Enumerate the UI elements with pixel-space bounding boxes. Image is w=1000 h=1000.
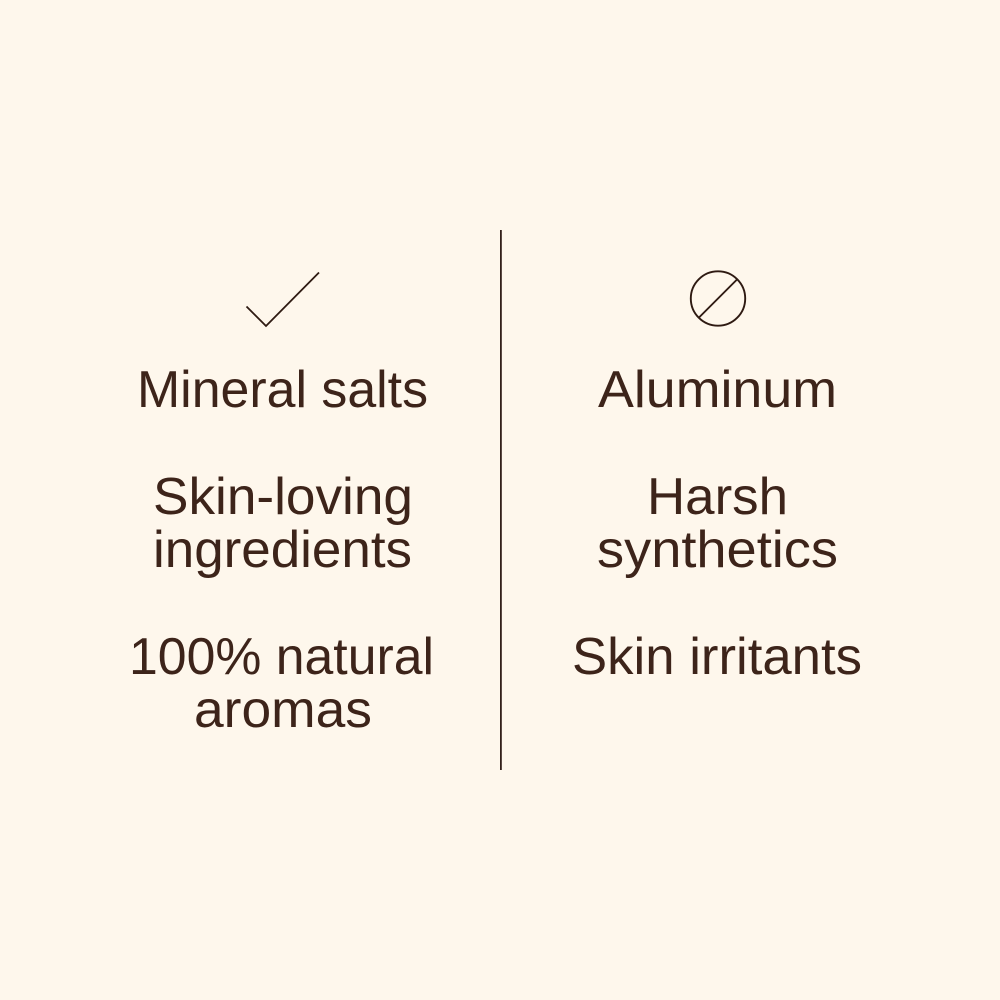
text: skin-loving ingredients: ingredients <box>153 521 412 579</box>
text: 100% natural aromas <box>129 628 434 739</box>
text: harsh synthetics <box>597 468 838 579</box>
icon: check mark <box>246 272 319 326</box>
text: skin irritants: Skin irritants <box>572 628 862 686</box>
panel: excluded ingredients <box>572 271 862 686</box>
text: 100% natural aromas: 100% natural <box>129 628 434 686</box>
text: 100% natural aromas: aromas <box>194 681 372 739</box>
text: skin-loving ingredients: Skin-loving <box>153 468 413 526</box>
text: mineral salts: Mineral salts <box>137 361 428 419</box>
text: harsh synthetics: synthetics <box>597 521 838 579</box>
panel: included ingredients <box>129 272 434 739</box>
text: skin-loving ingredients <box>153 468 413 579</box>
text: aluminum: Aluminum <box>598 361 837 419</box>
text: harsh synthetics: Harsh <box>647 468 788 526</box>
center divider <box>500 230 502 770</box>
icon: prohibited sign <box>691 271 745 326</box>
